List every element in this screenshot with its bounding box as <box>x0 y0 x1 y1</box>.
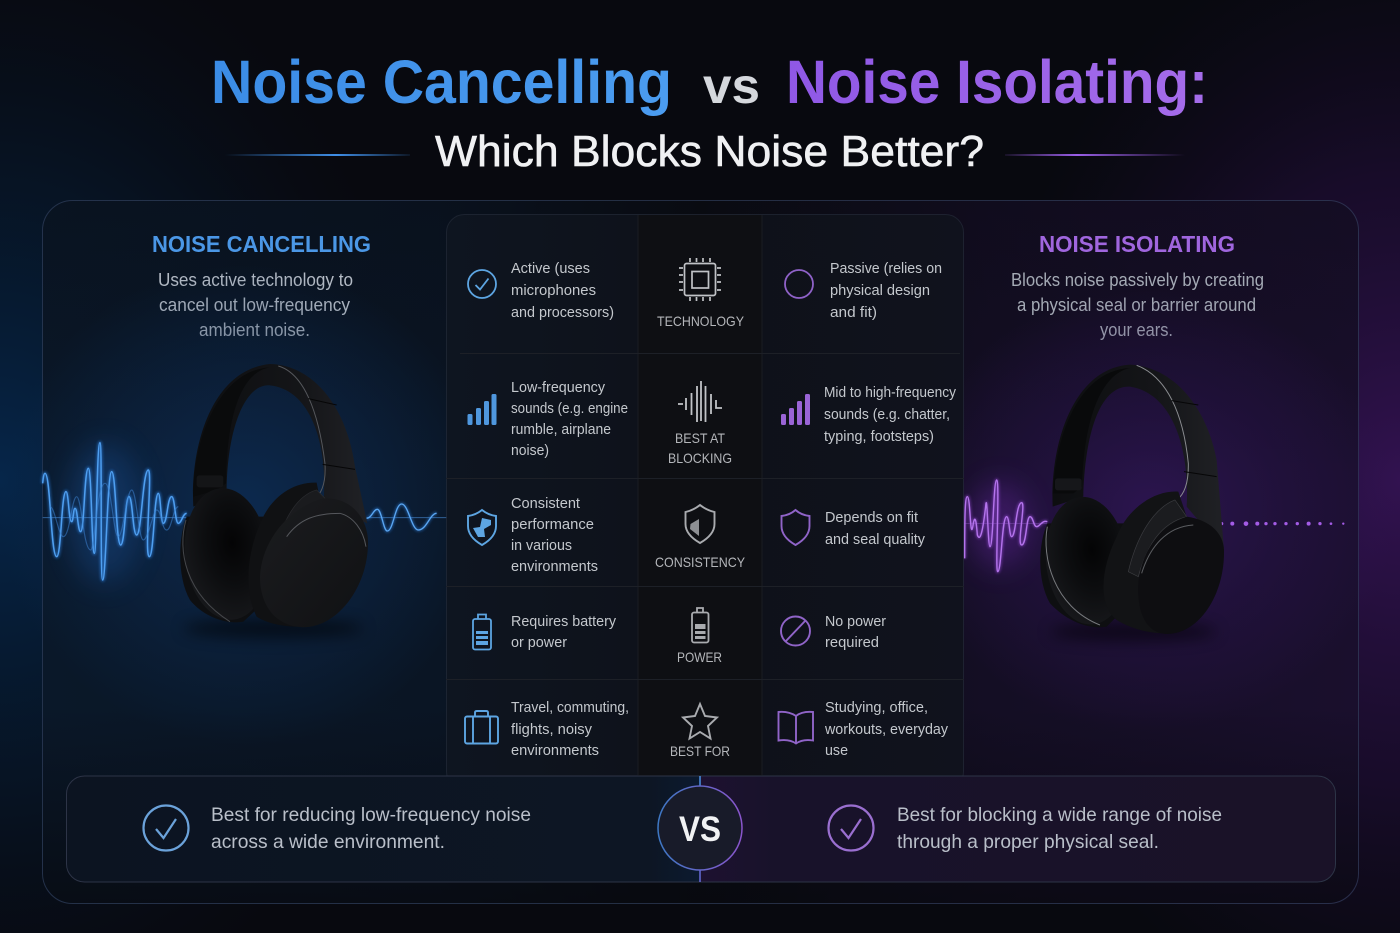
headphones glow <box>0 265 490 745</box>
icon: empty circle <box>785 270 813 298</box>
sound wave: purple <box>964 480 1344 572</box>
text: blocking isolating: Mid to high-frequency <box>824 384 956 401</box>
icon: blue check <box>144 806 188 850</box>
bottom summary bar <box>66 776 1336 882</box>
icon: grey battery <box>692 608 708 642</box>
text: power isolating: required <box>825 634 879 651</box>
text: best for cancelling: flights, noisy <box>511 721 592 738</box>
icon: chip <box>679 258 721 301</box>
row: power <box>473 608 886 665</box>
headphones: noise cancelling <box>178 364 368 638</box>
text: consistency cancelling: Consistent <box>511 495 581 512</box>
sound wave: blue <box>43 443 447 583</box>
text: blocking cancelling: noise) <box>511 442 549 459</box>
main panel <box>42 200 1358 904</box>
heading: noise cancelling: NOISE CANCELLING <box>152 231 371 257</box>
label: best at blocking <box>668 430 732 466</box>
text: technology cancelling <box>511 260 614 321</box>
text: power cancelling: or power <box>511 634 567 651</box>
icon: waveform <box>678 381 722 422</box>
text: best for isolating: Studying, office, <box>825 699 928 716</box>
text: technology cancelling: Active (uses <box>511 260 590 277</box>
icon: star <box>683 704 717 738</box>
title: Noise Cancelling <box>211 48 672 116</box>
text: blocking cancelling: Low-frequency <box>511 379 605 396</box>
icon: no power <box>781 616 810 646</box>
icon: purple shield <box>782 510 810 545</box>
row: technology <box>468 258 942 329</box>
label: power: POWER <box>677 649 722 665</box>
text: consistency isolating: and seal quality <box>825 531 925 548</box>
text: best for cancelling <box>511 699 629 759</box>
headphones glow <box>905 290 1395 730</box>
text: power isolating: No power <box>825 613 886 630</box>
icon: blue shield <box>468 510 496 545</box>
text: summary cancelling: Best for reducing low-frequency noise <box>211 804 531 826</box>
text: blocking isolating: sounds (e.g. chatter, <box>824 406 950 423</box>
text: consistency isolating <box>825 509 925 548</box>
text: best for isolating: workouts, everyday <box>824 721 948 738</box>
title <box>211 48 1208 116</box>
title: vs <box>703 58 760 114</box>
panel: noise cancelling side <box>0 231 490 745</box>
icon: open book <box>778 712 813 744</box>
text: blocking cancelling: rumble, airplane <box>511 421 611 438</box>
panel: noise isolating side <box>905 231 1395 730</box>
text: technology isolating: Passive (relies on <box>830 260 942 277</box>
text: best for isolating <box>824 699 948 759</box>
text: consistency cancelling: environments <box>511 558 598 575</box>
subtitle with side rules: Which Blocks Noise Better? <box>435 127 984 176</box>
text: summary isolating: through a proper physical seal. <box>897 831 1159 853</box>
text: best for isolating: use <box>825 742 848 759</box>
icon: grey shield <box>686 505 714 543</box>
label: consistency: CONSISTENCY <box>655 554 746 570</box>
description: noise isolating: a physical seal or barrier around <box>1017 295 1256 315</box>
text: summary isolating <box>897 804 1222 853</box>
label: best at blocking: BEST AT <box>675 430 725 446</box>
vs badge <box>658 786 742 870</box>
text: technology isolating: and fit) <box>830 304 877 321</box>
description: noise isolating: your ears. <box>1100 320 1173 340</box>
text: blocking cancelling: sounds (e.g. engine <box>511 400 628 417</box>
label: best at blocking: BLOCKING <box>668 450 732 466</box>
text: best for cancelling: environments <box>511 742 599 759</box>
row: best for <box>465 699 948 759</box>
vs badge: VS <box>679 810 721 849</box>
text: best for cancelling: Travel, commuting, <box>511 699 629 716</box>
text: technology cancelling: microphones <box>511 282 596 299</box>
label: technology: TECHNOLOGY <box>657 313 745 329</box>
description: noise isolating: Blocks noise passively by creating <box>1011 270 1264 290</box>
row: consistency <box>468 495 925 575</box>
description: noise cancelling: Uses active technology to <box>158 270 353 290</box>
text: consistency cancelling: performance <box>511 516 594 533</box>
text: blocking isolating <box>824 384 956 445</box>
text: power cancelling <box>511 613 616 651</box>
icon: blue battery <box>473 614 491 650</box>
text: consistency isolating: Depends on fit <box>825 509 919 526</box>
description: noise cancelling <box>158 270 353 340</box>
description: noise cancelling: ambient noise. <box>199 320 310 340</box>
text: technology isolating: physical design <box>830 282 930 299</box>
text: technology isolating <box>830 260 942 321</box>
heading: noise isolating: NOISE ISOLATING <box>1039 231 1235 257</box>
text: blocking cancelling <box>511 379 628 459</box>
text: consistency cancelling: in various <box>511 537 572 554</box>
text: blocking isolating: typing, footsteps) <box>824 428 934 445</box>
title: Noise Isolating: <box>786 48 1208 116</box>
text: summary cancelling <box>211 804 531 853</box>
icon: check circle <box>468 270 496 298</box>
icon: blue signal bars <box>468 394 496 425</box>
description: noise cancelling: cancel out low-frequency <box>159 295 350 315</box>
icon: purple signal bars <box>781 394 810 425</box>
description: noise isolating <box>1011 270 1264 340</box>
comparison table <box>446 214 964 790</box>
icon: briefcase <box>465 711 498 744</box>
text: power isolating <box>825 613 886 651</box>
text: consistency cancelling <box>511 495 598 575</box>
text: power cancelling: Requires battery <box>511 613 616 630</box>
row: best at blocking <box>468 379 956 466</box>
label: best for: BEST FOR <box>670 743 730 759</box>
icon: purple check <box>828 806 874 850</box>
text: summary isolating: Best for blocking a wide range of noise <box>897 804 1222 826</box>
headphones: noise isolating <box>1040 365 1224 641</box>
text: summary cancelling: across a wide environment. <box>211 831 445 853</box>
text: technology cancelling: and processors) <box>511 304 614 321</box>
